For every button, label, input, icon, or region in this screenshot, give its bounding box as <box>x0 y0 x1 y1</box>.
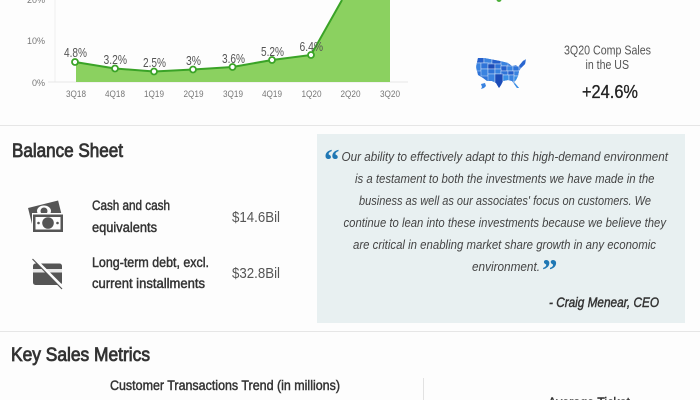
attribution: - Craig Menear, CEO <box>549 294 659 310</box>
x axis labels: 1Q20 <box>302 89 322 99</box>
data labels: 3% <box>186 53 201 68</box>
data labels: 6.4% <box>300 39 323 54</box>
data labels: 3.6% <box>222 51 245 66</box>
x axis labels: 1Q19 <box>144 89 164 99</box>
data labels: 4.8% <box>64 45 87 60</box>
x axis labels: 4Q19 <box>262 89 282 99</box>
heading: Key Sales Metrics: Key Sales Metrics <box>11 345 150 366</box>
y axis labels <box>27 0 45 88</box>
stat: US comp sales: 3Q20 Comp Sales <box>564 44 651 58</box>
data labels: 2.5% <box>143 55 166 70</box>
quote text: environment. <box>472 259 540 274</box>
area chart: comp sales growth <box>27 0 408 99</box>
x axis labels: 2Q19 <box>184 89 204 99</box>
stat: US comp sales: in the US <box>586 58 629 72</box>
row: cash and cash equivalents: equivalents <box>92 220 157 235</box>
row: long-term debt: current installments <box>92 276 205 291</box>
y axis labels: 10% <box>27 36 45 46</box>
heading: Balance Sheet: Balance Sheet <box>12 141 124 162</box>
x axis labels <box>66 89 400 99</box>
quote text: Our ability to effectively adapt to this high-demand environment <box>342 149 669 164</box>
quote text <box>342 149 669 274</box>
icon: opening quote mark: “ <box>324 142 340 177</box>
x axis labels: 3Q19 <box>223 89 243 99</box>
x axis labels: 2Q20 <box>340 89 360 99</box>
trend line <box>75 0 342 72</box>
row: long-term debt <box>92 255 209 291</box>
icon: cash <box>28 200 64 233</box>
data labels: 5.2% <box>261 44 284 59</box>
chart title: customer transactions: Customer Transactions Trend (in millions) <box>110 378 340 393</box>
row: cash and cash equivalents <box>92 198 170 235</box>
value: cash: $14.6Bil <box>232 209 280 226</box>
row: long-term debt: Long-term debt, excl. <box>92 255 209 270</box>
icon: closing quote mark: ” <box>542 252 558 287</box>
y axis labels: 0% <box>32 78 45 88</box>
panel: CEO quote <box>317 134 685 323</box>
value: debt: $32.8Bil <box>232 265 280 282</box>
icon: green marker remnant <box>496 0 502 2</box>
x axis labels: 3Q18 <box>66 89 86 99</box>
area fill <box>76 0 390 82</box>
stat: US comp sales <box>564 44 651 102</box>
data labels: 3.2% <box>104 52 127 67</box>
quote text: are critical in enabling market share growth in any economic <box>353 237 656 252</box>
icon: crossed credit card <box>32 258 64 289</box>
alaska <box>481 83 486 89</box>
x axis labels: 4Q18 <box>105 89 125 99</box>
row: cash and cash equivalents: Cash and cash <box>92 198 170 213</box>
quote text: business as well as our associates' focus on customers. We <box>359 193 651 208</box>
stat: US comp sales: +24.6% <box>582 82 638 102</box>
quote text: is a testament to both the investments we have made in the <box>355 171 654 186</box>
icon: US map <box>476 58 526 89</box>
data labels <box>64 39 323 70</box>
data markers <box>72 52 314 74</box>
x axis labels: 3Q20 <box>380 89 400 99</box>
